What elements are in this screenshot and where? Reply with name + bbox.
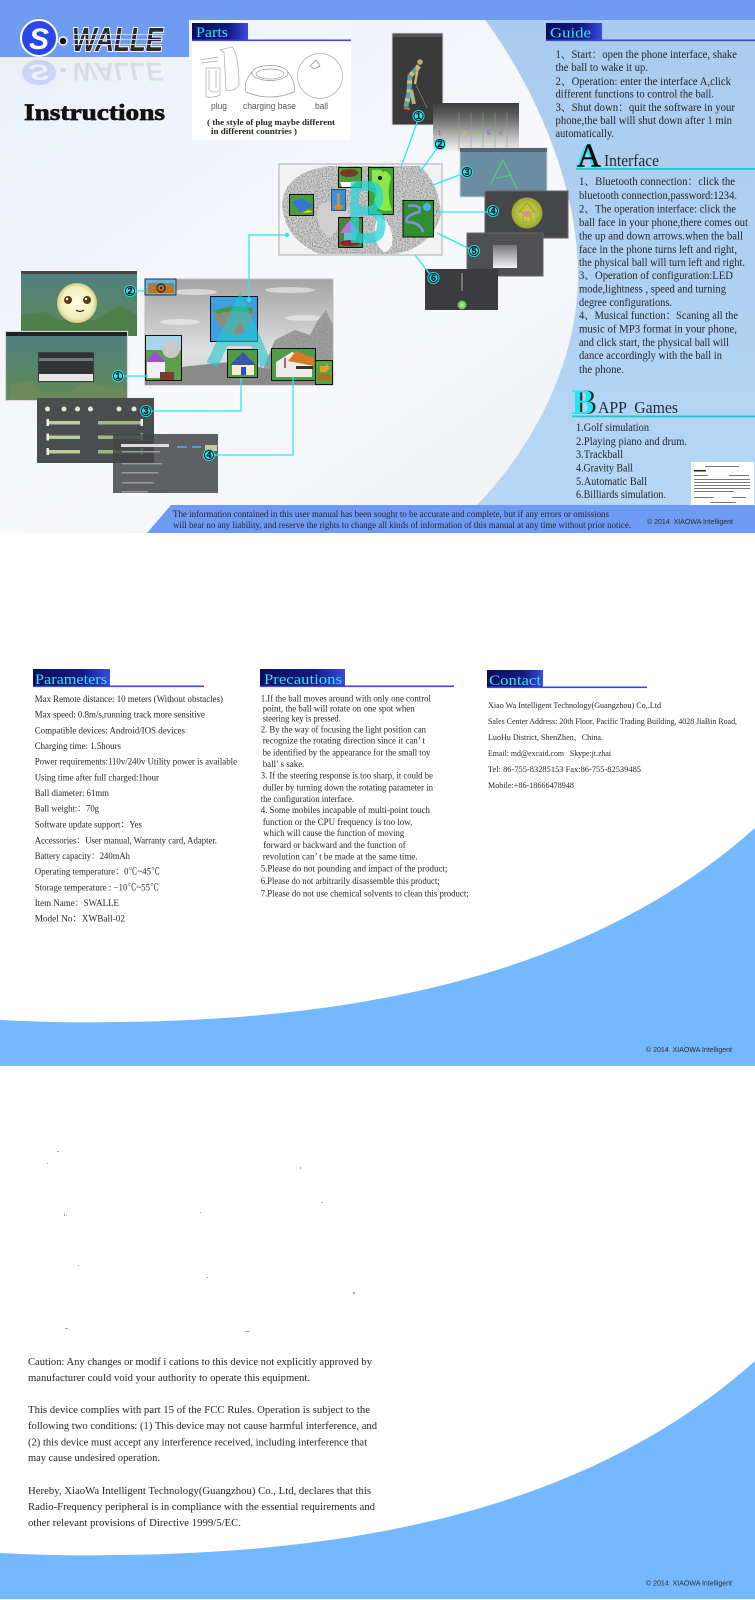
heading: A Interface: A (577, 138, 601, 174)
panel: parts (189, 20, 351, 141)
text: contact details: LuoHu District, ShenZhen，China. (488, 732, 603, 743)
text: parameters list: Max speed: 0.8m/s,running track more sensitive (35, 711, 205, 721)
top header band (0, 0, 755, 57)
text: FCC statement: may cause undesired operation. (28, 1453, 160, 1464)
heading: Parameters: Parameters (35, 672, 107, 688)
text: parameters list: Charging time: 1.5hours (35, 742, 121, 752)
marker 6 top (428, 272, 440, 284)
screenshot: gravity ball (485, 191, 568, 238)
text: interface instructions: the phone. (579, 364, 624, 376)
text: precautions list: steering key is pressed. (263, 715, 341, 725)
screenshot: configuration (37, 398, 154, 463)
screenshot: piano and drum: 6 (499, 131, 503, 137)
panel: interface A map diagram (279, 163, 442, 263)
heading: A Interface (575, 138, 755, 176)
configuration radio buttons (45, 406, 136, 412)
parts labels: ball (315, 101, 328, 111)
screenshot: piano and drum: 7 (511, 131, 515, 137)
screenshot: bluetooth dialog (6, 332, 128, 400)
configuration sliders (46, 419, 143, 455)
text: interface instructions: and click start, the physical ball will (579, 337, 729, 349)
marker 2 top: 2 (437, 139, 443, 149)
text: precautions list: 4. Some mobiles incapable of multi-point touch (261, 805, 430, 816)
text: FCC statement: This device complies with part 15 of the FCC Rules. Operation is subject to the (28, 1405, 370, 1416)
marker 3 left (140, 405, 152, 417)
heading: Contact: Contact (489, 673, 542, 689)
heading: A Interface: Interface (604, 151, 659, 170)
page 2 white background (0, 533, 755, 1066)
logo: S-WALLE: S (29, 23, 49, 56)
text: parameters list: Accessories：User manual, Warranty card, Adapter. (35, 836, 217, 846)
text: contact details (488, 700, 737, 790)
screenshot: piano and drum: 5 (487, 131, 491, 137)
heading: Precautions: Precautions (264, 672, 342, 688)
marker 2 left: 2 (127, 286, 133, 296)
text: app games list: 6.Billiards simulation. (576, 489, 666, 501)
text: precautions list: 7.Please do not use chemical solvents to clean this product; (261, 890, 469, 900)
heading: Parts (192, 23, 351, 41)
page 3 blue swoosh (0, 1361, 755, 1599)
screenshot: automatic ball (467, 233, 543, 276)
text: parameters list: Compatible devices: Android/IOS devices (35, 726, 185, 736)
text: parameters list: Using time after full charged:1hour (35, 772, 160, 783)
icon: track (403, 200, 434, 237)
text: interface instructions: face in the phone turns left and right, (579, 244, 737, 256)
connector lines: interface B (118, 291, 293, 455)
text: app games list: 5.Automatic Ball (576, 476, 647, 488)
heading: A Interface: A (575, 138, 599, 176)
marker 1 top (412, 110, 424, 122)
marker 5 top (468, 245, 480, 257)
text: guide steps: 2、Operation: enter the interface A,click (556, 76, 731, 88)
icon: music house (272, 348, 316, 380)
marker 2 left (124, 285, 136, 297)
screenshot: smiling ball (21, 271, 137, 336)
logo: S-WALLE: WALLE (72, 21, 164, 58)
text: contact details: Email: md@excaid.com Skype:jt.zhai (488, 748, 612, 758)
marker 2 top (434, 138, 446, 150)
footer band (147, 505, 755, 533)
panel: interface B landscape diagram (145, 279, 333, 385)
text: parameters list: Ball diameter: 61mm (35, 789, 110, 799)
text: parameters list: Software update support：Yes (35, 819, 142, 830)
text: interface instructions: degree configurations. (579, 297, 672, 309)
text: precautions list: duller by turning down the rotating parameter in (263, 784, 433, 794)
text: guide steps: the ball to wake it up. (556, 62, 648, 74)
warranty label card (691, 462, 754, 505)
heading: Parameters (33, 669, 204, 688)
icon: boot sign (316, 360, 332, 384)
marker 1 left (112, 370, 124, 382)
icon: fountain (332, 190, 346, 210)
marker 1 left: 1 (115, 371, 121, 381)
heading: Precautions (260, 669, 454, 688)
text: precautions list: ball’ s sake. (263, 760, 304, 770)
copyright: © 2014 XIAOWA Intelligent (647, 517, 734, 526)
marker 4 left (203, 449, 215, 461)
text: parameters list (35, 694, 237, 925)
text: precautions list: function or the CPU frequency is too low, (263, 817, 412, 828)
text: interface instructions: music of MP3 format in your phone, (579, 324, 737, 336)
text: FCC statement: (2) this device must accept any interference received, including interference that (28, 1438, 367, 1448)
text: caution: Caution: Any changes or modif i cations to this device not explicitly approved by (28, 1357, 373, 1368)
page 2 blue swoosh (0, 828, 755, 1066)
text: app games list (576, 422, 687, 501)
text: parameters list: Model No：XWBall-02 (35, 915, 125, 925)
marker 4 left: 4 (206, 450, 212, 460)
disclaimer text: The information contained in this user manual has been sought to be accurate and complete, but if any errors or omissions (173, 509, 609, 520)
icon: blue table (290, 194, 314, 216)
heading: Contact (487, 670, 647, 689)
disclaimer text: will bear no any liability, and reserve the rights to change all kinds of information of this manual at any time without prior notice. (173, 520, 631, 531)
disclaimer text (173, 509, 631, 531)
text: precautions list (261, 693, 469, 900)
text: declaration (28, 1486, 376, 1529)
icon: carousel (338, 218, 362, 248)
text: app games list: 2.Playing piano and drum. (576, 436, 687, 448)
text: declaration: Radio-Frequency peripheral is in compliance with the essential requirements and (28, 1502, 376, 1513)
text: contact details: Xiao Wa Intelligent Technology(Guangzhou) Co,.Ltd (488, 700, 662, 710)
copyright page 3: © 2014 XIAOWA Intelligent (646, 1578, 733, 1588)
text: interface instructions: 1、Bluetooth connection：click the (579, 176, 735, 188)
screenshot: golf (392, 33, 443, 125)
logo reflection: S (29, 59, 49, 85)
text: contact details: Mobile:+86-18666478948 (488, 780, 574, 790)
logo reflection: WALLE (72, 57, 164, 84)
icon: charging base (245, 66, 294, 97)
text: interface instructions: 3、Operation of configuration:LED (579, 270, 733, 282)
screenshot: piano and drum: 2 (451, 131, 455, 137)
icon: floating island (210, 296, 258, 342)
text: interface instructions: bluetooth connection,password:1234. (579, 190, 737, 202)
marker 1 top: 1 (416, 111, 421, 121)
screenshot: piano and drum: 1 (438, 131, 442, 137)
screenshot: trackball letter A (460, 148, 547, 197)
icon: target sign (145, 279, 176, 295)
parts labels (211, 101, 328, 111)
heading: Guide (546, 23, 755, 42)
text: precautions list: be identified by the appearance for the small toy (263, 747, 431, 758)
text: declaration: Hereby, XiaoWa Intelligent Technology(Guangzhou) Co., Ltd, declares that this (28, 1486, 371, 1497)
text: precautions list: 5.Please do not pounding and impact of the product; (261, 864, 447, 875)
screenshot: music list (113, 434, 218, 493)
text: parameters list: Ball weight:：70g (35, 805, 99, 815)
marker 3 left: 3 (143, 406, 149, 416)
screenshot: piano and drum: 3 (463, 131, 467, 137)
connector dots (247, 233, 289, 302)
text: parameters list: Battery capacity：240mAh (35, 852, 130, 862)
parts labels: plug (211, 101, 227, 111)
text: guide steps: different functions to control the ball. (556, 88, 714, 100)
icon: golfer figure (404, 59, 427, 109)
parts note: in different countries ) (211, 127, 297, 136)
marker 4 top (487, 205, 499, 217)
screenshot: billiards (425, 269, 498, 310)
text: interface instructions: mode,lightness , speed and turning (579, 284, 726, 296)
parts note: ( the style of plug maybe different (207, 118, 335, 127)
heading: Guide: Guide (550, 26, 591, 42)
icon: blue roof house (228, 350, 258, 378)
icon: satellite dish house (146, 336, 182, 380)
parts labels: charging base (243, 101, 296, 111)
text: app games list: 1.Golf simulation (576, 422, 649, 434)
text: precautions list: revolution can’ t be made at the same time. (263, 852, 418, 862)
marker 5 top: 5 (471, 246, 477, 256)
heading: B APP Games: B (574, 382, 596, 422)
screenshot: piano and drum: 4 (475, 131, 479, 137)
heading: B APP Games: APP Games (598, 398, 678, 417)
text: precautions list: which will cause the function of moving (263, 828, 405, 839)
text: FCC statement (28, 1405, 378, 1464)
page 1 background (0, 0, 755, 533)
text: interface instructions: 2、The operation interface: click the (579, 204, 736, 216)
text: precautions list: 6.Please do not arbitrarily disassemble this product; (261, 877, 440, 887)
text: interface instructions: dance accordingly with the ball in (579, 350, 722, 362)
curved blue guide background (477, 20, 755, 505)
icon: ball (298, 54, 342, 98)
icon: guitar (338, 168, 362, 188)
connector lines: interface A (249, 120, 493, 300)
icon: plug (200, 47, 239, 97)
text: precautions list: forward or backward and the function of (263, 840, 406, 851)
marker 6 top: 6 (431, 273, 436, 283)
text: caution: manufacturer could void your authority to operate this equipment. (28, 1373, 310, 1384)
text: guide steps: 1、Start：open the phone interface, shake (556, 49, 737, 61)
text: guide steps: automatically. (556, 128, 614, 140)
text: interface instructions (579, 176, 749, 376)
text: precautions list: recognize the rotating direction since it can’ t (263, 737, 425, 747)
title: Instructions: Instructions (24, 100, 165, 125)
heading: Parts: Parts (196, 25, 228, 41)
text: parameters list: Storage temperature : −10℃~55℃ (35, 882, 159, 893)
logo: S-WALLE (21, 20, 164, 58)
text: guide steps: 3、Shut down：quit the software in your (556, 102, 735, 114)
logo reflection (22, 57, 164, 85)
page 3 bottom strip (0, 1599, 755, 1600)
screenshot: piano and drum (433, 103, 519, 152)
marker 3 top: 3 (464, 167, 470, 177)
text: contact details: Tel: 86-755-83285153 Fax:86-755-82539485 (488, 764, 641, 774)
text: parameters list: Power requirements:110v/240v Utility power is available (35, 758, 237, 768)
heading: B APP Games (572, 382, 755, 422)
text: precautions list: 1.If the ball moves around with only one control (261, 693, 431, 704)
parts note (207, 118, 335, 136)
faint specks (47, 1151, 355, 1332)
text: parameters list: Operating temperature：0℃~45℃ (35, 867, 160, 878)
text: guide steps: phone,the ball will shut down after 1 min (556, 115, 732, 127)
text: caution (28, 1357, 373, 1384)
heading: B APP Games: B (572, 382, 594, 422)
text: app games list: 4.Gravity Ball (576, 462, 633, 474)
text: precautions list: point, the ball will rotate on one spot when (263, 704, 415, 714)
text: app games list: 3.Trackball (576, 449, 623, 461)
text: declaration: other relevant provisions of Directive 1999/5/EC. (28, 1518, 241, 1529)
icon: cyan letter A (212, 306, 266, 365)
marker 3 top (461, 166, 473, 178)
copyright page 2: © 2014 XIAOWA Intelligent (646, 1045, 733, 1054)
icon: golf course (368, 168, 394, 214)
text: contact details: Sales Center Address: 20th Floor, Pacific Trading Building, 4028 JiaBin Road, (488, 716, 737, 726)
icon: cyan letter B: B (347, 163, 388, 263)
text: parameters list: Max Remote distance: 10 meters (Without obstacles) (35, 694, 223, 705)
text: interface instructions: 4、Musical function：Scaning all the (579, 310, 738, 322)
text: guide steps (556, 49, 737, 140)
text: parameters list: Item Name：SWALLE (35, 899, 119, 909)
text: FCC statement: following two conditions: (1) This device may not cause harmful interference, and (28, 1421, 378, 1432)
text: precautions list: 2. By the way of focusing the light position can (261, 725, 426, 736)
text: precautions list: 3. If the steering response is too sharp, it could be (261, 771, 433, 782)
text: interface instructions: the up and down arrows.when the ball (579, 230, 743, 242)
text: precautions list: the configuration interface. (261, 794, 354, 805)
marker 4 top: 4 (490, 206, 496, 216)
